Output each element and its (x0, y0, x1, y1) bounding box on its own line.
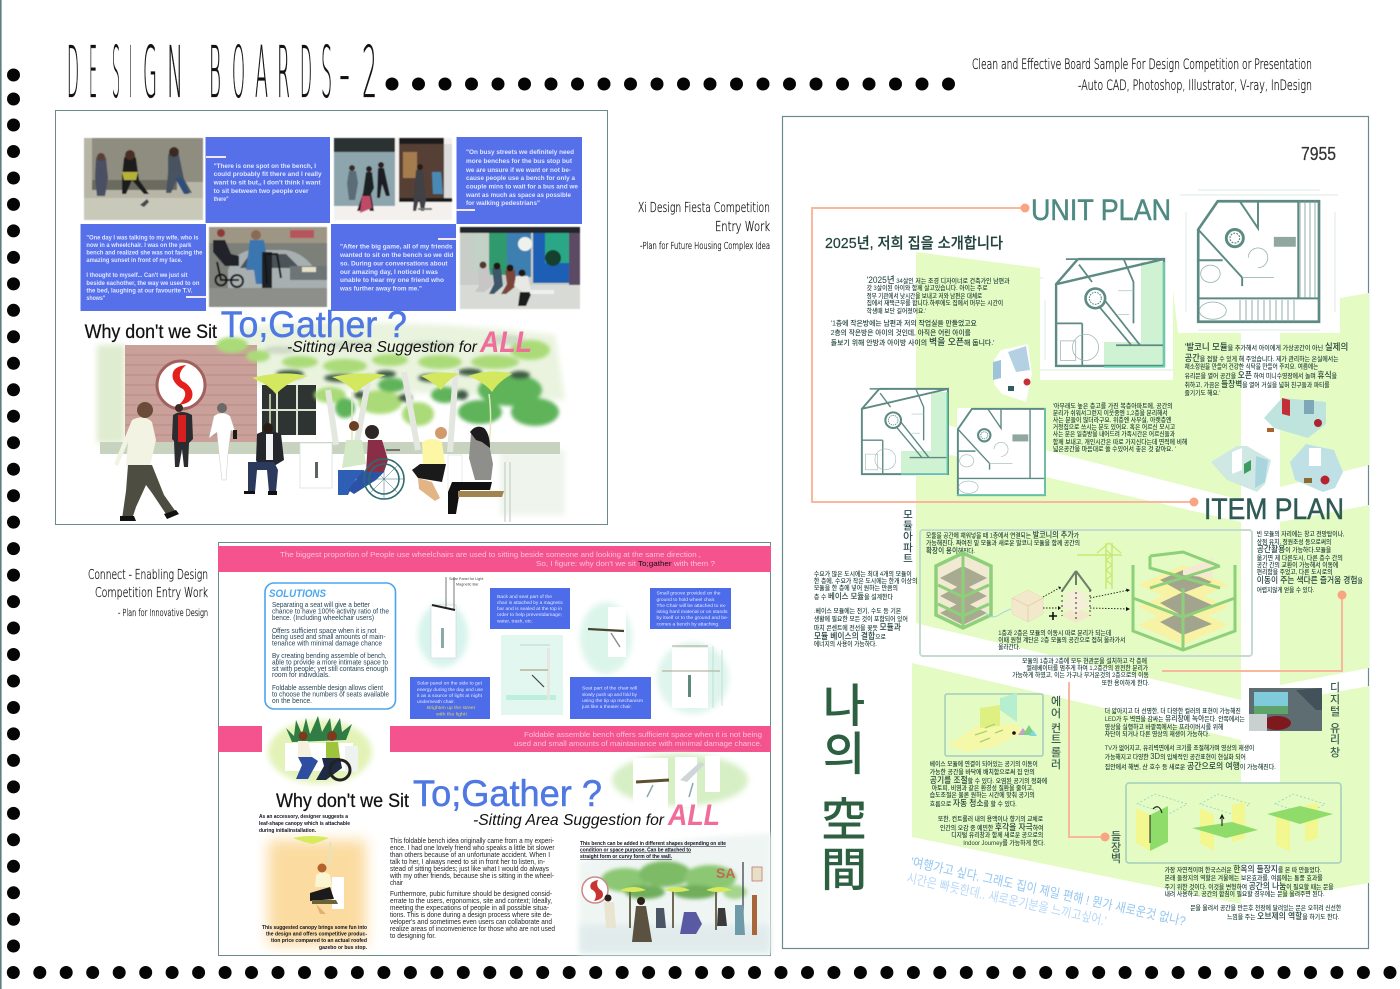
side caption: Connect: Connect - Enabling Design (88, 568, 208, 583)
floor plan: unit first floor (1040, 255, 1173, 380)
text block: bench idea: Furthermore, pubic furniture should be designed consid- (390, 890, 553, 898)
text: 2 (362, 31, 377, 114)
caption: bench shapes: straight form or curvy form of the wall. (580, 854, 673, 860)
caption: canopy bottom: This suggested canopy brings some fun into (262, 925, 367, 931)
callout: quote three (80, 224, 206, 311)
text block: balcony quote: 취하고, 가끔은 들창벽을 열어 거실을 넓혀 친구들과 파티를 (1185, 379, 1330, 389)
text block: base module: 한 층에, 수요가 작은 도시에는 한개 이상의 (814, 576, 917, 585)
callout: solar panel: it as a source of light at night (417, 693, 483, 699)
callout: small groove: Small groove provided on the (656, 590, 721, 596)
callout: back and seat: chair is attached by a magnetic (497, 600, 564, 606)
solutions box: being used and small amounts of main- (272, 632, 386, 641)
callout: small groove: comes a bench by attaching. (656, 622, 720, 628)
callout: quote four: so. During our conversations about (340, 260, 448, 268)
solutions box: Separating a seat will give a better (272, 600, 371, 609)
side caption: Xi Design Fiesta: -Plan for Future Housing Complex Idea (640, 241, 770, 252)
text block: intro quote: 갓 3살이된 아이와 함께 살고있습니다. 아이는 주로 (867, 283, 988, 292)
callout: quote three: amazing sunset in front of my face. (86, 257, 183, 264)
text block: balcony quote (1185, 341, 1348, 397)
side caption: Xi Design Fiesta: Xi Design Fiesta Competition (638, 201, 770, 216)
text block: intro quote: 정부 기관에서 낮시간을 보내고 저와 남편은 대체로 (867, 291, 982, 300)
diagram: bench elevation four (657, 642, 729, 714)
text block: air: 공기를 조절할 수 있다. 오염된 공기의 정화에 (930, 775, 1047, 785)
callout: seat part: just like a theater chair. (581, 704, 632, 710)
text block: shutter wall: 가장 자연적이며 한국스러운 한옥의 들장지를 본 따 만들었다. (1165, 864, 1322, 874)
heading: why don't we sit to;gather: -Sitting Area Suggestion for (473, 812, 665, 829)
diagram: module assembly (920, 530, 1252, 656)
pink banner middle (218, 726, 771, 752)
callout: solar panel: energy during the day and use (417, 687, 483, 693)
callout: quote one (206, 137, 330, 223)
callout: back and seat: order to help preventdamage; (497, 612, 562, 618)
heading: why don't we sit to;gather (276, 773, 720, 832)
slanted quote: '여행가고 싶다. 그래도 집이 제일 편해 ! 뭔가 새로운것 없나? (909, 854, 1187, 929)
floor plan: lower left (861, 388, 948, 476)
text block: bench idea: stead of sitting besides; just like what I would do always (390, 865, 549, 873)
solutions box: tenance with minimal damage chance (272, 638, 382, 648)
text block: bench idea: talk to her, I always need to sit in front her to listen, in- (390, 858, 546, 866)
heading: why don't we sit to;gather: ALL (479, 326, 532, 359)
callout: quote two: "On busy streets we definitely need (466, 149, 574, 156)
callout: small groove (650, 588, 731, 629)
module frame left (936, 553, 991, 628)
text block: bench idea: with my other friends, because she is sitting in the wheel- (389, 872, 555, 880)
text block: digital window (1105, 706, 1276, 771)
callout: seat part: using the tip up mechanism (582, 698, 643, 704)
solutions box: SOLUTIONS (269, 588, 327, 600)
big title: my space: 間 (821, 844, 867, 896)
shutter stage one (1136, 794, 1187, 851)
callout: quote two: couple mins to wait for a bus and we (466, 184, 578, 190)
left column of dots (7, 68, 20, 952)
photo: digital window room (1249, 688, 1322, 731)
callout: quote three: now in a wheelchair. I was on the park (86, 242, 192, 249)
callout: quote four: "After the big game, all of my friends (340, 244, 453, 250)
heading: why don't we sit to;gather: -Sitting Area Suggestion for (287, 339, 478, 356)
callout: quote four (331, 224, 456, 311)
building frame right (1133, 552, 1235, 650)
text block: bench idea: to designing for. (390, 932, 436, 940)
pink banner top: The biggest proportion of People use wheelchairs are used to sitting beside someone and looking at the same direction , (280, 550, 701, 559)
text block: base module: 층 수 베이스 모듈을 설계한다 (814, 591, 893, 601)
text block: shutter wall: 문을 올려서 공간을 만든후 천장에 달려있는 문은 오히려 신선한 (1190, 903, 1341, 912)
heading: unit plan: UNIT PLAN (1031, 194, 1171, 227)
photo: shop street (334, 138, 452, 220)
title (67, 31, 377, 114)
text block: base module: 생활에 필요한 모든 것이 포함되어 있어 (814, 614, 908, 623)
callout: back and seat: Back and seat part of the (497, 594, 552, 600)
title: R (277, 31, 290, 114)
solutions box (265, 583, 396, 709)
text block: digital window: 더 얇아지고 더 선명한, 더 다양한 컬러의 표현이 가능해진 (1105, 706, 1241, 715)
callout: solar panel (410, 677, 490, 719)
module tower (1060, 571, 1092, 623)
text block: bench idea: than others because of an unfortunate accident. When I (390, 851, 550, 859)
figure: man on the phone (114, 402, 179, 521)
illustration: street with benches: SA (716, 865, 735, 881)
text block: vacant modules (1257, 529, 1363, 594)
heading: why don't we sit to;gather: To;Gather ? (221, 304, 407, 345)
diagram: module assembly: 확장이 용이해진다. (926, 545, 975, 555)
heading: 2025 intro: 2025년, 저희 집을 소개합니다 (825, 235, 1003, 252)
code number: 7955 (1301, 144, 1336, 164)
caption: canopy bottom: the design and offers competitive produc- (266, 932, 367, 938)
text block: rooms quote: 돌보기 위해 안방과 아이방 사이의 벽을 오픈해 둡니다.' (831, 336, 994, 347)
text block: base module (814, 569, 917, 648)
text block: vacant modules: 빈 모듈의 자리에는 창고 전망탑이나, (1257, 529, 1345, 538)
figure: seated man (244, 423, 284, 495)
callout: quote two: we are unsure if we want or not be- (465, 167, 571, 174)
callout: seat part (570, 677, 651, 719)
text block: bench idea: chair (390, 879, 404, 887)
connector: right arm (1162, 590, 1346, 671)
text block: vacant modules: 공간 간의 교환이 가능해서 이동에 (1257, 560, 1338, 569)
solutions box: on the bence. (272, 696, 312, 705)
text block: bench idea: errate to the users, ergonomics, site and context; Ideally, (390, 897, 552, 905)
callout: quote three: beside eachother, the way we used to on (86, 280, 200, 287)
callout: back and seat (490, 588, 570, 629)
illustration: two people at bench with plants (268, 716, 372, 784)
title: E (89, 31, 97, 114)
diagram: module assembly: 가능해진다. 짜여진 밑 모듈과 새로운 발코니 모듈을 함께 공간의 (926, 538, 1080, 547)
side caption: Connect: Competition Entry Work (95, 586, 208, 601)
figure: woman with dark hair (448, 427, 504, 514)
text block: air: 디지털 유리창과 함께 새로운 공으로의 (951, 830, 1043, 839)
callout: solar panel: with the light! (436, 712, 467, 718)
isometric model: tall (993, 344, 1032, 402)
callout: quote four: wanted to sit on the bench so we did (339, 252, 454, 259)
side caption: Xi Design Fiesta: Entry Work (715, 220, 770, 235)
crane (1077, 543, 1122, 589)
solutions box: By creating bending assemble of bench, (272, 651, 387, 660)
shutter stage two (1192, 794, 1258, 851)
caption: canopy bottom: tion price compared to an actual roofed (271, 938, 367, 944)
isometric model: balcony one (1264, 398, 1326, 438)
vertical label: air controller: 에어컨트롤러 (1051, 695, 1061, 771)
text block: stair note: 1층과 2층은 모듈의 이동시 따로 분리가 되는데 (998, 628, 1111, 637)
solutions box: bence. (Including wheelchair users) (272, 613, 374, 622)
bench block (300, 443, 332, 488)
big title: my space: 의 (823, 728, 865, 780)
callout: quote two: cause people use a bench for only a (466, 175, 575, 182)
vertical label: digital window: 디지털유리창 (1330, 681, 1340, 759)
text block: base module: 수요가 많은 도시에는 최대 4개의 모듈이 (814, 569, 912, 578)
text block: bench idea: veloper's and sometimes even users can collaborate and (390, 918, 552, 926)
text block: bench idea (389, 837, 555, 940)
text block: balcony quote: 즐기기도 해요.' (1185, 388, 1220, 397)
text block: base module: .베이스 모듈에는 전기, 수도 등 기본 (814, 606, 901, 615)
pink banner top (218, 546, 771, 572)
callout: quote three: "One day I was talking to my wife, who is (86, 234, 199, 242)
heading: why don't we sit to;gather: Why don't we Sit (85, 322, 218, 343)
solutions box: sit with people; yet still contains enough (272, 664, 388, 673)
callout: quote two (456, 137, 582, 224)
diagram: bench elevation three (580, 602, 632, 674)
text block: digital window: LED가 두 벽면을 감싸는 유리창에 녹아든다. 안쪽에서는 (1105, 713, 1245, 723)
callout: quote three: the bed, laughing at our favourite T.V. (86, 288, 193, 294)
page edge (0, 0, 2, 989)
text block: digital window: 영상을 실행하고 바깥쪽에서는 프라이버시를 위해 (1105, 722, 1224, 731)
diagram: bench elevation one (418, 577, 484, 667)
text block: intro quote: 학생때 보단 길어졌어요.' (867, 306, 926, 315)
top row of dots (386, 78, 955, 90)
heading: why don't we sit to;gather (85, 304, 532, 359)
big title: my space: 空 (821, 794, 867, 846)
panel: Connect board (218, 542, 771, 956)
callout: solar panel: Brighten up the street (427, 705, 476, 711)
text block: entry doors: 모듈의 1층과 2층에 모두 현관문을 설치하고 각 층에 (1022, 656, 1147, 665)
text block: duplex quote: 넓은공간을 마음대로 쓸 수있어서 좋은 것 같아요. ' (1053, 444, 1176, 453)
callout: back and seat: water, trash, etc. (497, 618, 533, 624)
text block: shutter wall (1165, 864, 1341, 921)
heading: why don't we sit to;gather: Why don't we Sit (276, 791, 410, 812)
solutions box: able to provide a more intimate space to (272, 658, 388, 666)
isometric model: balcony two (1211, 446, 1271, 492)
solutions box: to choose the numbers of seats available (272, 690, 389, 698)
callout: quote four: unable to hear my one friend who (340, 277, 444, 284)
text block: air: 습도조절은 물론 원하는 시간에 맞춰 공기의 (930, 790, 1035, 799)
title: O (232, 31, 245, 114)
big title: my space: 나 (823, 680, 865, 732)
connector: shutter wall (1069, 682, 1110, 842)
text block: duplex quote: 함께 보내고, 개인시간은 따로 가지신다는데 면적에 비해 (1053, 437, 1187, 446)
caption: canopy top (259, 814, 350, 834)
floor plan: lower middle (957, 408, 1045, 496)
heading: why don't we sit to;gather: ALL (667, 799, 720, 832)
side caption: Connect (88, 568, 208, 619)
text block: bench idea: tions. This is done during a design process where site de- (390, 911, 553, 919)
text block: duplex quote: '아무래도 높은 층고를 가진 복층아파트에, 공간의 (1053, 401, 1173, 410)
text block: balcony quote: 유리문을 열어 공간을 오픈 하여 미니수영장에서 놀며 휴식을 (1185, 370, 1337, 380)
text block: shutter wall: 내려 사용하고, 공간의 합침이 필요할 경우에는 문을 올려주면 된다. (1165, 889, 1325, 898)
callout: back and seat: bar and is sealed at the top in (497, 606, 562, 612)
callout: quote four: was further away from me." (339, 286, 422, 292)
vertical label: module apartment: 모듈아파트 (903, 509, 913, 565)
text block: base module: 모듈 베이스의 결합으로 (814, 631, 886, 641)
text block: air: Indoor Journey를 가능하게 한다. (963, 838, 1045, 847)
diagram: shutter wall (1126, 783, 1341, 863)
caption: canopy top: during initialinstallation. (259, 828, 317, 834)
title: D (300, 31, 312, 114)
text block: base module: 모듈을 한 층에 넣어 원하는 만큼의 (814, 583, 898, 592)
callout: quote four: our amazing day, I noticed I was (340, 269, 439, 276)
title: S (112, 31, 120, 114)
callout: solar panel: underneath chair. (417, 699, 455, 705)
title: B (209, 31, 221, 114)
panel: housing module board (782, 116, 1369, 948)
heading: item plan: ITEM PLAN (1204, 493, 1344, 526)
text block: digital window: 차단이 되거나 다른 영상의 재생이 가능하다. (1105, 729, 1210, 738)
pink banner middle: used and small amounts of maintainance with minimal damage chance. (514, 739, 762, 748)
text block: stair note: 올라간다. (998, 642, 1020, 651)
figure: man and woman in wheelchair (338, 421, 404, 499)
text block: shutter wall: 느낌을 주는 오브제의 역할을 하기도 한다. (1227, 911, 1340, 921)
caption: canopy top: As an accessory, designer suggests a (259, 814, 348, 820)
text block: stair note (998, 628, 1125, 651)
text block: bench idea: This foldable bench idea originally came from a my experi- (390, 837, 555, 845)
text block: balcony quote: 공간을 접할 수 있게 해 주었습니다. 제가 관리하는 온실에서는 (1185, 353, 1339, 363)
photo: wheelchair and car (209, 227, 327, 307)
slanted quote: 시간은 빠듯한데.. 새로운기분을 느끼고싶어.' (905, 870, 1108, 928)
plus sign (1049, 612, 1057, 620)
callout: quote two: for walking pedestrians" (466, 200, 540, 207)
diagram: bench elevation two (501, 635, 563, 715)
diagram: air controller (945, 693, 1043, 756)
caption: bench shapes: condition or space purpose. Can be attached to (580, 848, 691, 854)
callout: quote two: want as much as space as possible (465, 192, 571, 199)
module cube (1012, 590, 1043, 622)
text block: vacant modules: 옮기면 제 다른도시, 다른 층수 간의 (1257, 553, 1343, 562)
pink banner middle: Foldable assemble bench offers sufficient space when it is not being (524, 730, 762, 739)
callout: small groove: The Chair will be attached to ex- (656, 603, 727, 609)
tree foliage (216, 335, 559, 426)
text block: air (930, 759, 1047, 847)
text block: rooms quote (831, 318, 994, 347)
text block: bench idea: ence. I had one lovely friend who speaks a little bit slower (390, 844, 555, 852)
callout: quote two: more benches for the bus stop but (466, 158, 573, 165)
callout: quote three: I thought to myself... Can't we just sit (86, 272, 188, 279)
text block: duplex quote: 분리가 쉬워서그런지 이웃중엔 1,2층을 분리해서 (1053, 408, 1168, 417)
text block: intro quote (867, 275, 1010, 315)
text block: vacant modules: 이동이 주는 색다른 즐거움 경험을 (1257, 575, 1363, 585)
diagram: module assembly: 모듈을 공간에 채워넣을 때 1층에서 연결되는 발코니의 추가가 (926, 530, 1079, 540)
title: S (321, 31, 332, 114)
text block: entry doors (1012, 656, 1150, 687)
caption: canopy bottom: gazebo or bus stop. (319, 945, 368, 951)
text block: air: 아토피, 비염과 같은 환경성 질환을 줄이고, (932, 783, 1034, 792)
text block: digital window: TV가 없어지고, 유리벽면에서 크기를 조절해가며 영상의 재생이 (1105, 743, 1254, 752)
text block: rooms quote: '1층에 작은방에는 남편과 저의 작업실을 만들었고요 (831, 318, 977, 328)
diagram: bench elevation one: Magnetic Bar (456, 582, 479, 586)
vertical label: shutter wall: 들장벽 (1111, 830, 1121, 865)
text block: duplex quote: 사는 분은 일층방을 내어드려 가족시간은 어르신들과 (1053, 429, 1175, 438)
pink banner top: So, I figure: why don't we sit To;gather with them ? (536, 559, 715, 568)
title: - (339, 31, 350, 114)
text block: entry doors: 또한 용이하게 한다. (1102, 678, 1150, 687)
caption: bench shapes: This bench can be added in different shapes depending on site (580, 841, 726, 847)
side caption: Connect: - Plan for Innovative Design (118, 608, 208, 619)
text block: air: 또한, 컨트롤러 내의 용액이나 향기의 교체로 (938, 814, 1043, 823)
text block: entry doors: 엘레베이터를 멈추게 하여 1,2층간의 완전한 분리가 (1026, 663, 1148, 672)
floor plan: large (1178, 178, 1340, 333)
callout: small groove: ground to hold wheel chair. (656, 597, 716, 603)
big title: my space (821, 680, 867, 896)
callout: solar panel: Solar panel on the side to get (417, 680, 483, 686)
caption: canopy top: leaf-shape canopy which is attachable (259, 821, 350, 827)
title: A (255, 31, 268, 114)
text block: vacant modules: 상점 유치, 정원조성 등으로써의 (1257, 537, 1331, 546)
illustration: street with benches (579, 834, 771, 954)
callout: seat part: Seat part of the chair will (582, 686, 637, 692)
solutions box: Foldable assemble design allows client (272, 683, 383, 692)
text block: air: 흐름으로 자동 청소를 할 수 있다. (930, 798, 1017, 808)
text block: rooms quote: 2층의 작은방은 아이의 것인데, 아직은 어린 아이를 (831, 328, 971, 337)
figure: woman in yellow top (412, 427, 447, 501)
callout: quote one: to sit between two people over (214, 188, 309, 195)
text block: digital window: 가능해지고 다양한 3D의 입체적인 공간표현이 현실화 되어 (1105, 751, 1246, 761)
dotted arrows (1043, 587, 1129, 609)
text block: stair note: 이때 원형 계단은 2층 모듈의 공간으로 접혀 올라가서 (998, 635, 1125, 644)
text block: intro quote: '2025년 34살인 저는 조경 디자이너로 건축가인 남편과 (867, 275, 1010, 285)
text block: vacant modules: 어렵지않게 얻을 수 있다. (1257, 585, 1315, 594)
text block: shutter wall: 본래 들장지의 역할은 겨울에는 보온효과를, 여름에는 통풍 효과를 (1165, 873, 1323, 882)
text block: duplex quote (1053, 401, 1187, 453)
callout: seat part: slowly push up and fold by (582, 692, 638, 698)
caption: canopy bottom (262, 925, 368, 951)
callout: quote three: shows" (86, 295, 105, 302)
text block: vacant modules: 공간활용이 가능하다.모듈을 (1257, 544, 1331, 554)
text block: bench idea: meeting the expecations of people in all possible situa- (390, 904, 550, 912)
solutions box: Offers sufficient space when it is not (272, 626, 376, 635)
text block: balcony quote: 채소정원을 만들어 건강한 식탁을 만들어 주지요. 여름에는 (1185, 362, 1318, 370)
text block: vacant modules: 편리함을 주었고, 다른 도시로의 (1257, 567, 1332, 576)
shutter stage three (1267, 794, 1333, 851)
text block: intro quote: 집에서 재택근무를 합니다.하루에도 집에서 머무는 시간이 (867, 298, 1003, 307)
connector: unit to item (812, 204, 1198, 506)
illustration: folding bench render (612, 754, 748, 810)
callout: small groove: by itself or to the ground and be- (656, 615, 729, 621)
text block: base module: 마치 콘센트에 전선을 꽂듯 모듈과 (814, 622, 901, 632)
photo: bus shelter (460, 227, 580, 309)
isometric model: balcony three (1290, 444, 1343, 492)
callout: quote one: "There is one spot on the bench, I (214, 163, 316, 170)
text block: entry doors: 가능하게 하였고, 이는 가구나 무거운것의 2층으로의 이동 (1012, 670, 1149, 679)
logo (157, 361, 205, 409)
text block: duplex quote: 거정집으로 쓰시는 분도 있어요. 혹은 어르신 모시고 (1053, 422, 1175, 431)
title: I (129, 31, 132, 114)
top right description (972, 57, 1312, 94)
title: D (67, 31, 79, 114)
text block: air: 가능한 공간을 바닥에 배치함으로써 집 안의 (930, 767, 1035, 776)
side caption: Xi Design Fiesta (638, 201, 770, 252)
callout: small groove: isting hard material or on stands (656, 609, 728, 615)
diagram: bench elevation one: Solar Panel for Light (449, 577, 484, 581)
text block: base module: 에너지의 사용이 가능하다. (814, 639, 877, 648)
callout: quote one: there" (214, 196, 229, 203)
canopy leaves (252, 371, 512, 394)
lime background bands (912, 252, 1369, 904)
callout: quote one: could probably fit there and I really (214, 171, 322, 178)
text block: duplex quote: 사는 분들이 많더라구요. 위층엔 사무실, 아랫층엔 (1053, 415, 1172, 424)
bottom row of dots (7, 966, 1396, 979)
text block: air: 베이스 모듈에 연결이 되어있는 공기의 이동이 (930, 759, 1038, 768)
title: G (143, 31, 157, 114)
solutions box: chance to have 100% activity ratio of the (272, 606, 389, 616)
text block: balcony quote: '발코니 모듈을 추가해서 아이에게 가상공간이 아닌 실제의 (1185, 341, 1348, 352)
text block: bench idea: realize areas of inconvenience for those who are not used (390, 925, 555, 933)
figure: woman in white (209, 403, 237, 480)
caption: bench shapes (580, 841, 726, 860)
text block: shutter wall: 주기 위한 것이다. 이것을 변형하여 공간의 나눔이 필요할 때는 문을 (1165, 881, 1334, 891)
figure: man in red shirt (172, 404, 193, 467)
callout: quote one: want to sit but,, I don't think I want (213, 180, 322, 186)
title: N (167, 31, 183, 114)
panel: Xi Design Fiesta board (56, 110, 608, 524)
solutions box: room for indivduals. (272, 670, 330, 679)
illustration: canopy and woman (268, 836, 366, 945)
text block: digital window: 집안에서 해변, 산 호수 등 새로운 공간으로의 여행이 가능해진다. (1105, 761, 1276, 771)
callout: quote three: bench and realized she was not facing the (86, 250, 203, 256)
illustration: street scene with canopy bench (97, 322, 565, 522)
photo: people on bench (84, 138, 203, 220)
text block: air: 인간의 오감 중 예민한 후각을 자극하여 (940, 822, 1044, 832)
heading: why don't we sit to;gather: To;Gather ? (413, 773, 602, 814)
